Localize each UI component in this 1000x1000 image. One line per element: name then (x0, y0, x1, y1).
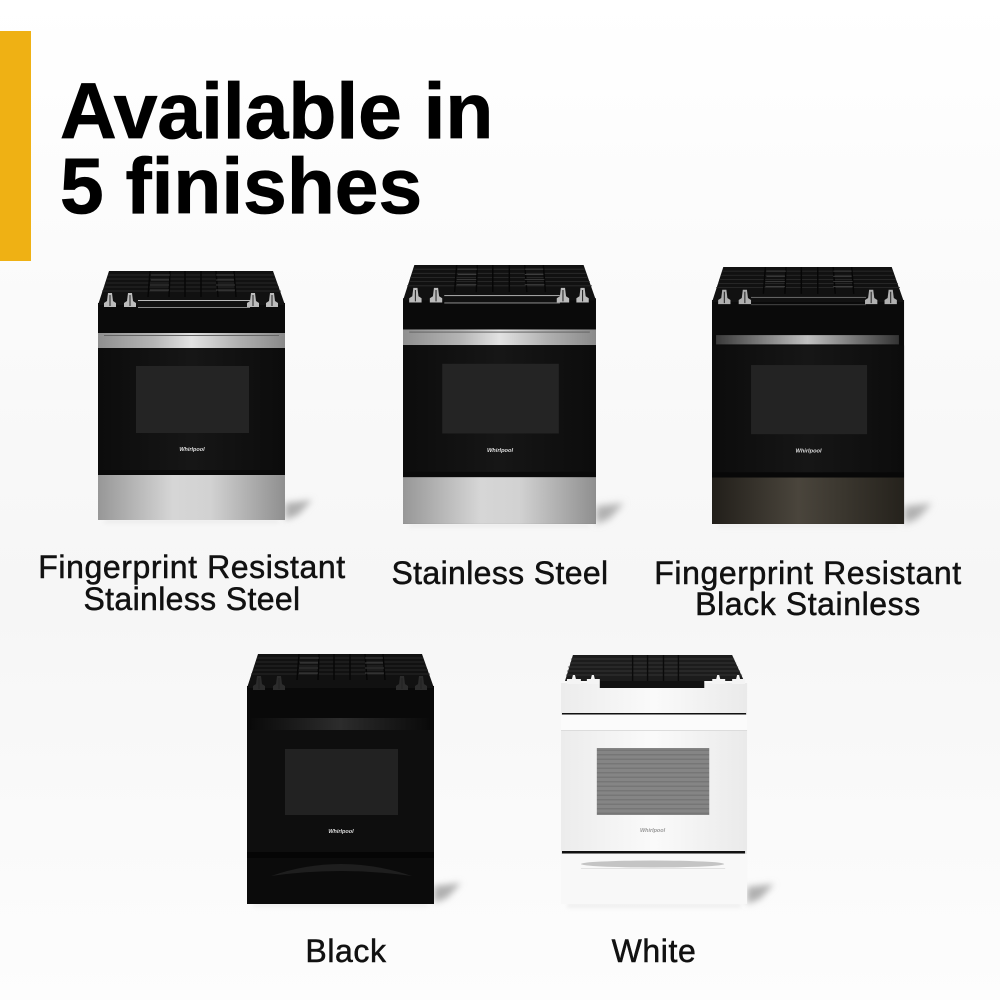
panel: fingerprint resistant stainless steel (38, 271, 346, 617)
range: black (247, 654, 461, 906)
accent bar (0, 31, 31, 261)
range: white (561, 655, 774, 907)
range: black stainless: Whirlpool (796, 449, 822, 455)
label: Fingerprint Resistant (38, 549, 346, 585)
range: stainless steel (403, 265, 624, 527)
range: black stainless (712, 267, 932, 527)
range: stainless steel: Whirlpool (487, 448, 513, 454)
title: Available in (60, 67, 493, 155)
range: white: Whirlpool (640, 828, 666, 834)
panel: white (561, 655, 774, 969)
label: Stainless Steel (83, 581, 301, 617)
panel: black (247, 654, 461, 969)
panel: stainless steel (391, 265, 624, 591)
label: Black Stainless (695, 586, 921, 622)
range: black: Whirlpool (328, 829, 354, 835)
range: fingerprint resistant stainless steel (98, 271, 312, 523)
title: 5 finishes (60, 142, 422, 230)
range: fingerprint resistant stainless steel: Whirlpool (179, 447, 205, 453)
label: Fingerprint Resistant (654, 555, 962, 591)
label: Black (305, 933, 387, 969)
panel: fingerprint resistant black stainless (654, 267, 962, 622)
label: Stainless Steel (391, 555, 609, 591)
label: White (612, 933, 696, 969)
